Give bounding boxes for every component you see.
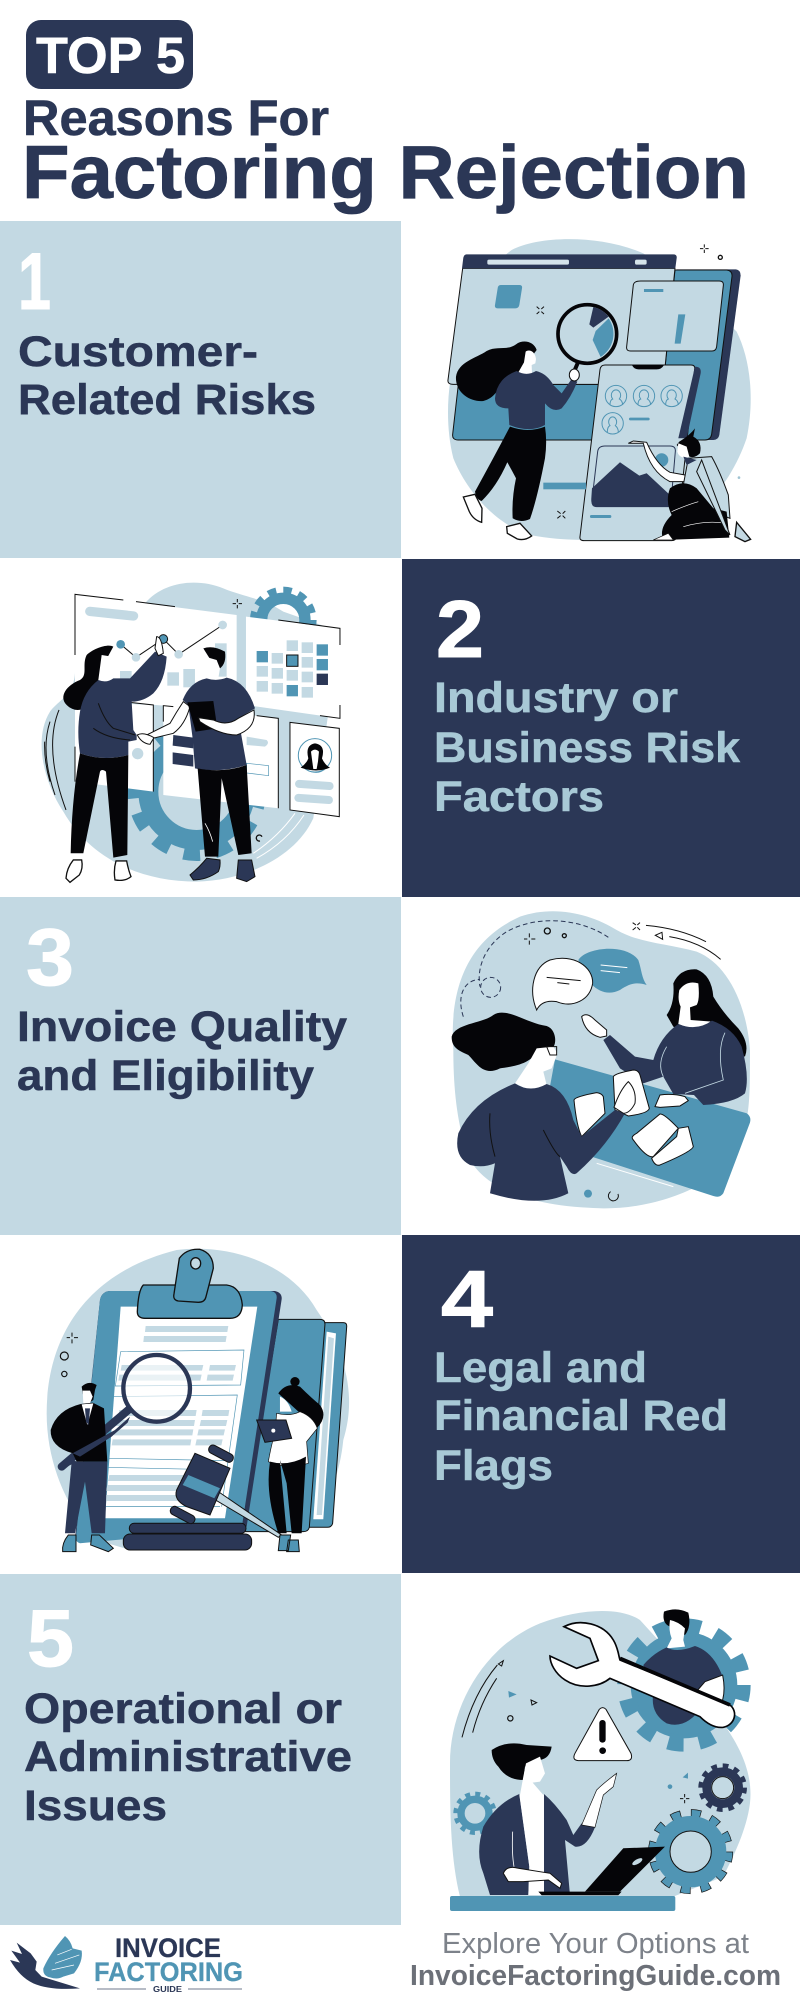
documents (574, 1070, 693, 1165)
chart line (116, 621, 227, 687)
heading: legal and financial red flags: Flags (434, 1442, 553, 1490)
footer logo (10, 1933, 243, 1994)
gear bottom (133, 728, 260, 855)
heading: legal and financial red flags (434, 1344, 728, 1490)
warning triangle (574, 1708, 632, 1761)
badge: top 5: TOP 5 (36, 27, 185, 84)
panel: reason 4 text (402, 1235, 800, 1573)
woman (479, 1743, 617, 1895)
heading: operational or administrative issues: Issues (24, 1782, 167, 1830)
number 4: 4 (441, 1255, 493, 1345)
big gear (626, 1627, 742, 1743)
woman left (456, 342, 579, 540)
heading: invoice quality and eligibility: Invoice Quality (17, 1003, 347, 1051)
heading: industry or business risk factors: Industry or (434, 674, 678, 722)
wrench (550, 1623, 735, 1727)
heading: industry or business risk factors (434, 674, 740, 821)
gear top (254, 591, 313, 649)
speech bubble teal (578, 949, 647, 993)
woman (63, 637, 167, 882)
number 5: 5 (27, 1594, 74, 1684)
dark gear (701, 1766, 744, 1809)
illustration: woman inspecting dashboard with magnifier and phone (448, 239, 751, 542)
heading: operational or administrative issues: Operational or (24, 1685, 342, 1733)
icon: eagle wings (10, 1936, 82, 1989)
left woman (452, 1013, 635, 1201)
heading: invoice quality and eligibility (17, 1003, 347, 1100)
heading: customer-related risks (18, 328, 316, 424)
calendar (257, 640, 328, 698)
heading: invoice quality and eligibility: and Eligibility (17, 1052, 314, 1100)
right woman (582, 969, 747, 1105)
panel: reason 5 text (0, 1574, 401, 1925)
footer call to action (410, 1928, 781, 1992)
illustration: mechanic with wrench, warning sign, gears and woman at laptop (450, 1609, 750, 1911)
left gear (456, 1794, 494, 1833)
woman right (628, 428, 751, 542)
desk (450, 1896, 675, 1911)
heading: industry or business risk factors: Factors (434, 773, 604, 821)
number 3: 3 (26, 913, 74, 1003)
footer logo: INVOICE (115, 1933, 221, 1963)
heading line: reasons for: Reasons For (23, 90, 329, 146)
mechanic (643, 1609, 724, 1725)
footer logo: FACTORING (94, 1957, 243, 1987)
woman (257, 1377, 323, 1552)
number 2: 2 (436, 585, 484, 675)
magnifier (558, 305, 617, 375)
heading: customer-related risks: Customer- (18, 328, 258, 376)
laptop (538, 1847, 665, 1895)
heading: operational or administrative issues: Administrative (24, 1733, 352, 1781)
heading: operational or administrative issues (24, 1685, 352, 1830)
footer logo: GUIDE (153, 1985, 183, 1994)
man (51, 1383, 130, 1552)
heading: industry or business risk factors: Business Risk (434, 724, 740, 772)
illustration: two people shaking hands before charts and gears (42, 583, 340, 882)
panel: reason 2 text (402, 559, 800, 897)
footer call to action: InvoiceFactoringGuide.com (410, 1960, 781, 1992)
number 1: 1 (18, 237, 51, 327)
footer call to action: Explore Your Options at (442, 1928, 749, 1960)
bottom gear (652, 1813, 729, 1890)
gavel (169, 1444, 282, 1537)
heading: legal and financial red flags: Legal and (434, 1344, 647, 1392)
illustration: two women discussing documents at a table (452, 911, 750, 1208)
profile card (294, 739, 334, 804)
magnifier (62, 1355, 190, 1467)
speech bubble white (533, 958, 593, 1010)
panel: reason 1 text (0, 221, 401, 558)
heading line: factoring rejection: Factoring Rejection (22, 130, 749, 214)
title block (22, 20, 749, 214)
illustration: clipboard, magnifier, gavel and two people (47, 1249, 349, 1552)
clipboard (75, 1249, 282, 1543)
heading: legal and financial red flags: Financial Red (434, 1392, 728, 1440)
heading: customer-related risks: Related Risks (18, 376, 316, 424)
gavel block (123, 1523, 252, 1550)
panel: reason 3 text (0, 897, 401, 1235)
man (137, 647, 255, 882)
folder (243, 1319, 347, 1532)
